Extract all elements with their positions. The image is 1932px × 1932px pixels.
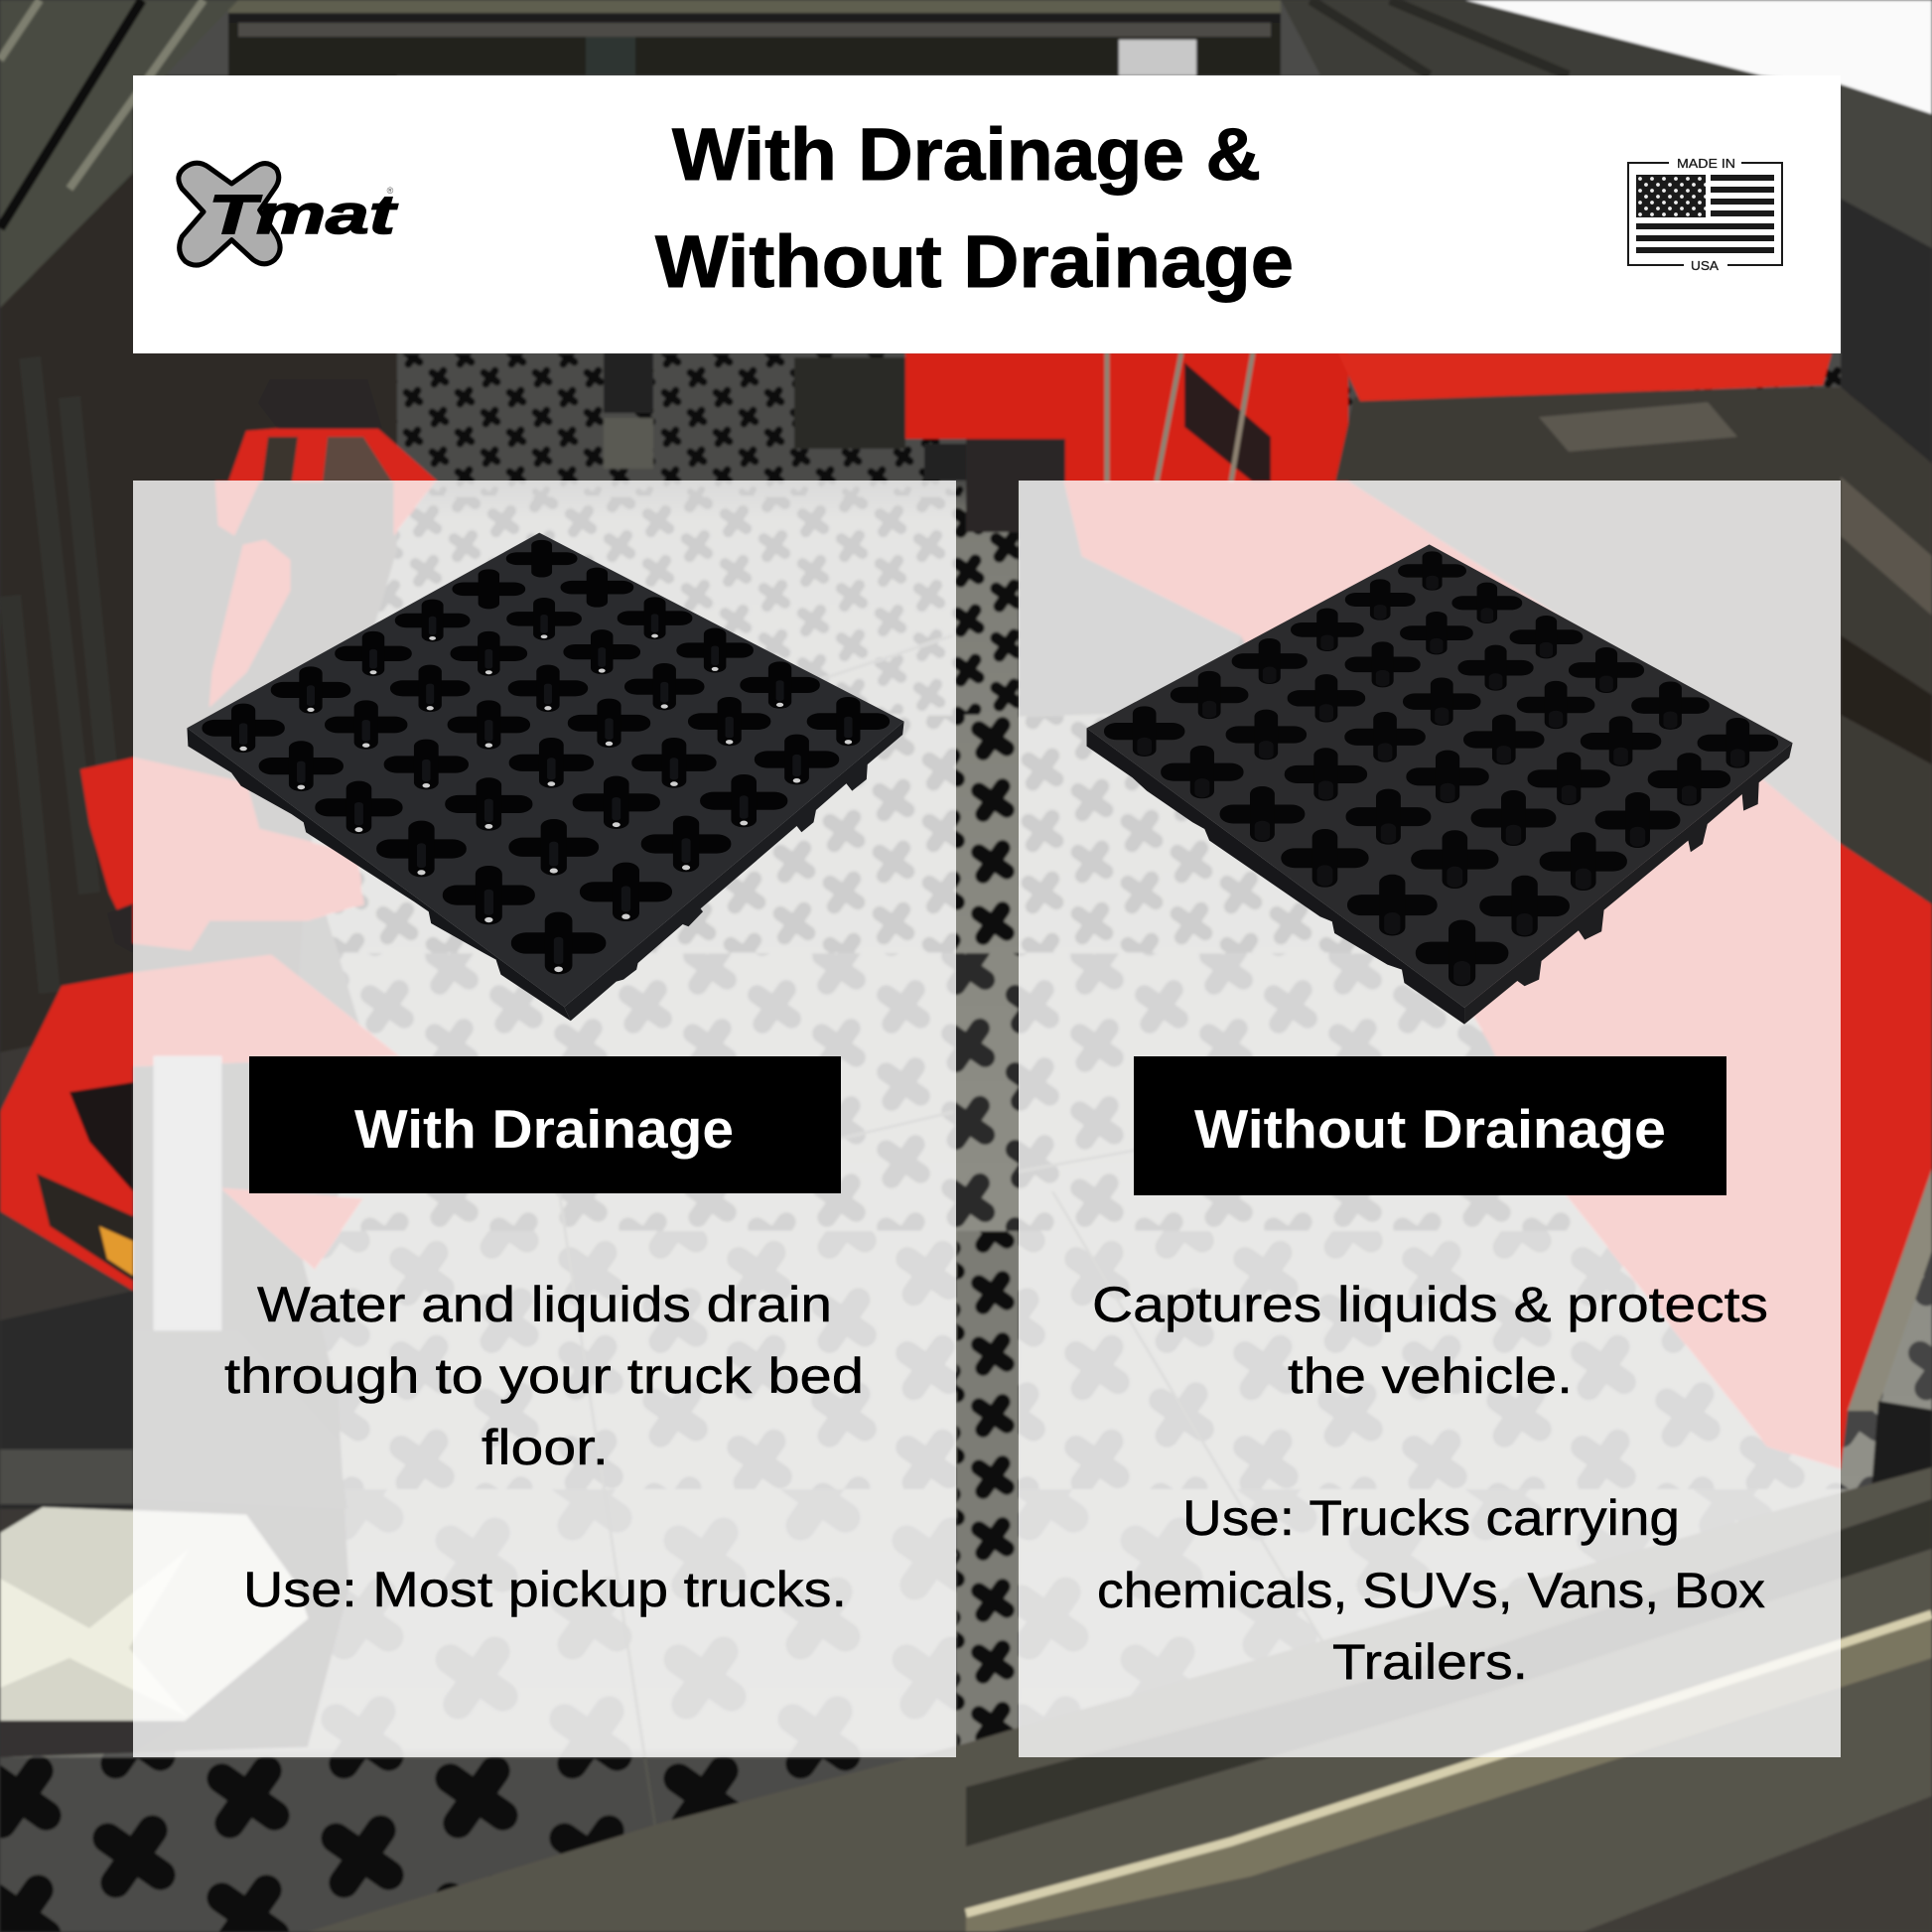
description text: chemicals, SUVs, Vans, Box: [1097, 1563, 1765, 1618]
product tile with drainage holes: [187, 533, 904, 1021]
panel: with drainage: [133, 481, 956, 1757]
label button: with drainage: With Drainage: [354, 1098, 734, 1160]
badge: made in USA: [1628, 156, 1782, 273]
description text: [224, 1277, 864, 1617]
panel: without drainage: [1019, 481, 1841, 1757]
description text: Use: Trucks carrying: [1182, 1490, 1680, 1546]
label button: with drainage: [249, 1056, 841, 1193]
product tile without drainage holes: [1087, 544, 1793, 1025]
description text: the vehicle.: [1288, 1348, 1573, 1404]
title: With Drainage &: [672, 113, 1261, 196]
logo: Tmat: [179, 163, 398, 265]
description text: Captures liquids & protects: [1092, 1277, 1768, 1332]
badge: made in USA: MADE IN: [1677, 156, 1735, 171]
description text: Trailers.: [1332, 1634, 1528, 1690]
description text: [1092, 1277, 1768, 1690]
header banner: [133, 75, 1841, 353]
description text: Use: Most pickup trucks.: [243, 1562, 847, 1617]
title: [655, 113, 1294, 303]
label button: without drainage: Without Drainage: [1194, 1098, 1666, 1160]
description text: floor.: [482, 1420, 609, 1475]
logo: Tmat: Tmat: [208, 183, 398, 245]
badge: made in USA: USA: [1691, 258, 1719, 273]
description text: through to your truck bed: [224, 1348, 864, 1404]
logo: Tmat: ®: [387, 186, 394, 196]
label button: without drainage: [1134, 1056, 1726, 1195]
description text: Water and liquids drain: [257, 1277, 832, 1332]
title: Without Drainage: [655, 220, 1294, 303]
